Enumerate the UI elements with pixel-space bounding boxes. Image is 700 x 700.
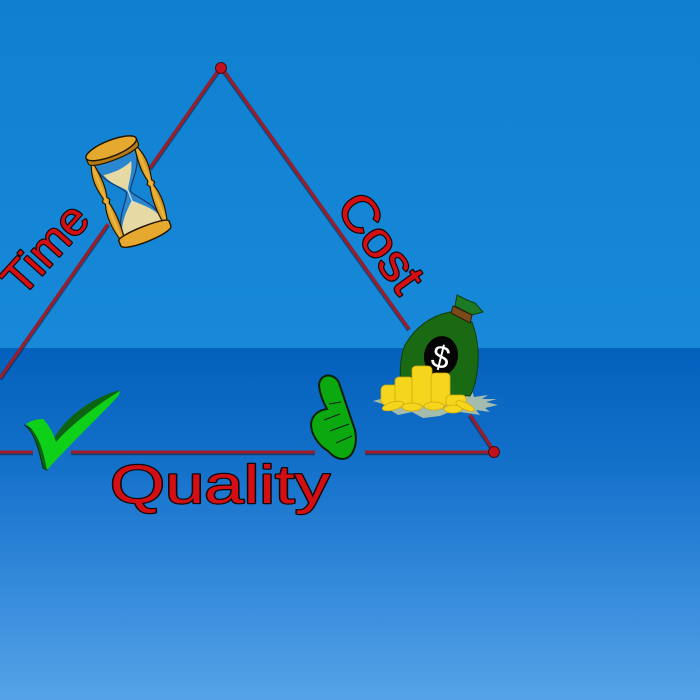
triangle vertex: top <box>216 62 226 74</box>
label: Cost: Cost <box>326 182 436 304</box>
bag body <box>400 312 478 396</box>
icon: green thumbs up <box>311 376 356 459</box>
triangle lines <box>0 68 494 453</box>
bag neck tie <box>451 306 472 323</box>
triangle vertex: right <box>488 446 500 458</box>
ground burst <box>373 390 498 418</box>
background: lower gradient <box>0 348 700 700</box>
background: upper sky <box>0 0 700 348</box>
icon: hourglass <box>82 130 175 252</box>
dollar sign: $ <box>428 337 454 377</box>
icon: green check mark <box>24 390 120 470</box>
coin stacks <box>381 366 476 413</box>
bag top <box>455 295 483 315</box>
dollar badge <box>421 333 461 379</box>
icon: money bag with coins <box>373 295 498 418</box>
label: Quality: Quality <box>110 455 330 515</box>
